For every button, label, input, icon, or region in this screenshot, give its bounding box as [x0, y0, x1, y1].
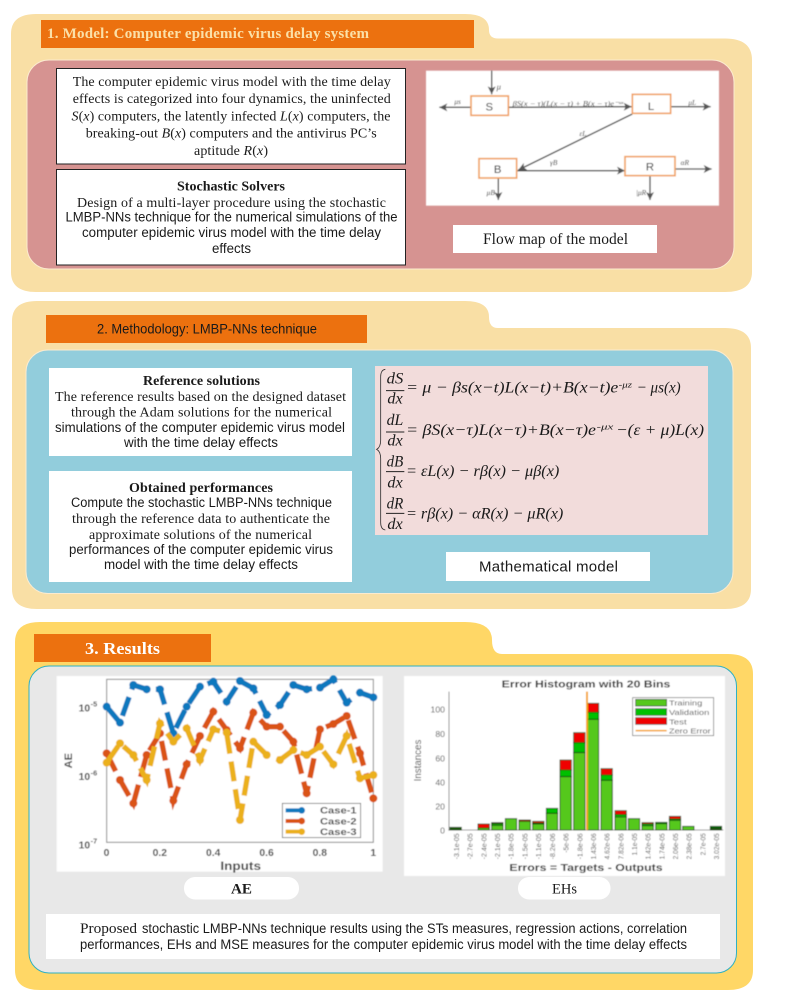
caption: mathematical model	[446, 552, 650, 581]
mathematical model equations: dx	[387, 390, 403, 407]
chart: error histogram: Instances	[413, 740, 424, 781]
flow diagram: μ	[496, 81, 502, 91]
mathematical model equations: dx	[387, 474, 403, 491]
histogram x tick labels: -1.8e-05	[507, 833, 516, 859]
chart: error histogram: Errors = Targets - Outputs	[509, 863, 663, 874]
mathematical model equations: = μ − βs(x−t)L(x−t)+B(x−t)e	[406, 380, 618, 397]
mathematical model equations: = εL(x) − rβ(x) − μβ(x)	[406, 463, 559, 480]
axis labels: 0.6	[259, 848, 274, 859]
text block: model description: aptitude R(x)	[194, 144, 268, 159]
flow diagram	[426, 71, 719, 206]
flow diagram: S	[486, 102, 494, 114]
axis labels: -5	[91, 700, 97, 709]
legend: histogram	[633, 698, 714, 736]
legend: histogram: Test	[669, 717, 688, 726]
histogram x tick labels: -2.1e-05	[493, 833, 502, 859]
axis labels: -7	[91, 837, 97, 846]
text block: model description	[56, 68, 406, 164]
mathematical model equations: = βS(x−τ)L(x−τ)+B(x−τ)e	[406, 422, 596, 439]
series: Case-1	[103, 675, 377, 737]
axis labels: 0	[104, 848, 110, 859]
panel: section 3 results	[15, 622, 753, 990]
caption: flow map: Flow map of the model	[483, 231, 628, 248]
mathematical model equations: −(ε + μ)L(x)	[616, 422, 704, 439]
legend: AE cases	[282, 803, 361, 838]
flow diagram: μL	[688, 98, 696, 107]
chart: error histogram: 100	[431, 705, 445, 715]
caption: AE: AE	[231, 882, 252, 898]
flow diagram: βS(x − τ)(L(x − τ) + B(x − τ)e⁻ᵘˣ	[512, 99, 624, 108]
histogram x tick labels: 3.02e-05	[712, 833, 721, 859]
text block: obtained performances: model with the time delay effects	[104, 557, 298, 572]
flow diagram: εL	[579, 129, 586, 138]
axis labels: 10	[79, 840, 90, 851]
axis labels: -6	[91, 768, 97, 777]
chart: error histogram: Error Histogram with 20 Bins	[502, 680, 671, 691]
histogram x tick labels: -2.7e-05	[466, 833, 475, 859]
histogram x tick labels: 4.62e-06	[603, 833, 612, 859]
axis labels: 1	[370, 848, 376, 859]
text block: model description: The computer epidemic virus model with the time delay	[73, 75, 391, 90]
histogram x tick labels: -5e-06	[562, 833, 571, 853]
text block: results summary: Proposed	[80, 921, 137, 937]
text block: stochastic solvers: LMBP-NNs technique for the numerical simulations of the	[66, 210, 398, 225]
mathematical model equations: dS	[387, 370, 403, 387]
histogram x tick labels: 7.82e-06	[617, 833, 626, 859]
text block: model description: breaking-out B(x) computers and the antivirus PC’s	[86, 126, 377, 142]
legend: histogram: Validation	[669, 708, 709, 717]
histogram x tick labels: 2.7e-05	[698, 833, 707, 855]
panel: section 2 methodology	[12, 301, 751, 609]
text block: model description: effects is categorized into four dynamics, the uninfected	[73, 92, 391, 107]
chart: error histogram: 80	[435, 729, 445, 739]
text block: obtained performances	[49, 471, 352, 582]
histogram x tick labels: 1.1e-05	[630, 833, 639, 855]
mathematical model equations: = rβ(x) − αR(x) − μR(x)	[406, 505, 563, 522]
axis labels: 10	[79, 772, 90, 783]
histogram x tick labels: 1.74e-05	[657, 833, 666, 859]
histogram x tick labels	[452, 833, 721, 859]
panel: model inner panel	[27, 60, 734, 269]
histogram x tick labels: -8.2e-06	[548, 833, 557, 859]
histogram x tick labels: 2.06e-05	[671, 833, 680, 859]
axis labels: Inputs	[220, 860, 261, 873]
axis labels: 0.2	[153, 848, 167, 859]
chart: error histogram: 0	[440, 825, 445, 835]
histogram x tick labels: -3.1e-05	[452, 833, 461, 859]
flow diagram: γB	[550, 158, 558, 167]
text block: obtained performances: approximate solutions of the numerical	[89, 528, 312, 543]
text block: reference solutions: The reference results based on the designed dataset	[55, 390, 346, 405]
flow diagram: R	[646, 161, 654, 173]
text block: reference solutions: simulations of the computer epidemic virus model	[55, 420, 345, 435]
mathematical model equations: − μs(x)	[637, 380, 681, 397]
legend: AE cases: Case-2	[320, 816, 357, 826]
chart: error histogram: 40	[435, 777, 445, 787]
text block: stochastic solvers	[56, 170, 406, 265]
mathematical model equations	[375, 366, 708, 535]
mathematical model equations: dL	[387, 412, 403, 429]
text block: obtained performances: through the reference data to authenticate the	[72, 512, 330, 527]
histogram x tick labels: 1.42e-05	[644, 833, 653, 859]
flow diagram: B	[494, 164, 501, 176]
histogram x tick labels: -2.4e-05	[479, 833, 488, 859]
chart: error histogram: 60	[435, 753, 445, 763]
caption: flow map	[453, 225, 657, 253]
series: Case-3	[103, 719, 377, 824]
legend: histogram: Training	[669, 699, 702, 708]
series: Case-2	[103, 708, 377, 807]
mathematical model equations: dx	[387, 433, 403, 450]
text block: reference solutions: Reference solutions	[143, 374, 261, 389]
mathematical model equations: dR	[387, 495, 404, 512]
mathematical model equations: -μz	[619, 380, 632, 389]
chart: error histogram: 20	[435, 801, 445, 811]
text block: reference solutions: with the time delay effects	[123, 435, 278, 450]
legend: histogram: Zero Error	[669, 726, 711, 735]
histogram bars	[450, 703, 722, 830]
text block: obtained performances: performances of the computer epidemic virus	[69, 542, 333, 557]
flow diagram: μs	[454, 97, 461, 106]
text block: results summary: stochastic LMBP-NNs technique results using the STs measures, regression actions, correlation	[142, 921, 687, 936]
histogram x tick labels: -1.8e-06	[575, 833, 584, 859]
heading: section 1	[41, 20, 474, 48]
axis labels: 0.8	[313, 848, 327, 859]
axis labels: 10	[79, 703, 90, 714]
text block: obtained performances: Obtained performances	[129, 481, 274, 496]
text block: results summary	[46, 914, 720, 959]
caption: mathematical model: Mathematical model	[479, 558, 618, 576]
histogram x tick labels: -1.1e-05	[534, 833, 543, 859]
text block: stochastic solvers: effects	[212, 241, 251, 256]
flow diagram: αR	[681, 158, 690, 167]
heading: section 3: 3. Results	[85, 639, 160, 658]
text block: results summary: performances, EHs and MSE measures for the computer epidemic virus model with the time delay effects	[80, 937, 687, 952]
text block: reference solutions	[49, 368, 352, 456]
text block: obtained performances: Compute the stochastic LMBP-NNs technique	[71, 495, 332, 510]
flow diagram: L	[648, 101, 654, 113]
flow diagram: |μR	[636, 188, 647, 197]
text block: model description: S(x) computers, the latently infected L(x) computers, the	[72, 110, 390, 124]
caption: EHs: EHs	[552, 882, 577, 898]
legend: AE cases: Case-1	[320, 806, 357, 816]
panel: results inner panel	[29, 666, 736, 973]
flow diagram: μB	[487, 188, 495, 197]
heading: section 3	[34, 634, 211, 662]
text block: stochastic solvers: Design of a multi-layer procedure using the stochastic	[77, 196, 386, 211]
legend: AE cases: Case-3	[320, 827, 357, 837]
text block: stochastic solvers: computer epidemic virus model with the time delay	[82, 225, 381, 240]
heading: section 2	[46, 315, 367, 343]
mathematical model equations: dB	[387, 454, 404, 471]
axis labels: 0.4	[206, 848, 221, 859]
panel: methodology inner panel	[26, 350, 733, 594]
histogram x tick labels: 1.43e-06	[589, 833, 598, 859]
chart: error histogram	[404, 676, 725, 876]
caption: AE	[184, 877, 299, 900]
mathematical model equations: -μx	[597, 423, 614, 432]
histogram x tick labels: 2.38e-05	[685, 833, 694, 859]
text block: reference solutions: through the Adam solutions for the numerical	[71, 406, 332, 421]
chart: AE line chart	[57, 675, 383, 873]
histogram x tick labels: -1.5e-05	[520, 833, 529, 859]
heading: section 1: 1. Model: Computer epidemic virus delay system	[47, 26, 370, 42]
axis labels: AE	[63, 753, 75, 768]
heading: section 2: 2. Methodology: LMBP-NNs technique	[97, 320, 317, 336]
text block: stochastic solvers: Stochastic Solvers	[177, 180, 286, 194]
panel: section 1 model	[11, 14, 752, 292]
mathematical model equations: dx	[387, 516, 403, 533]
axis labels	[63, 700, 376, 873]
caption: EHs	[518, 877, 610, 900]
